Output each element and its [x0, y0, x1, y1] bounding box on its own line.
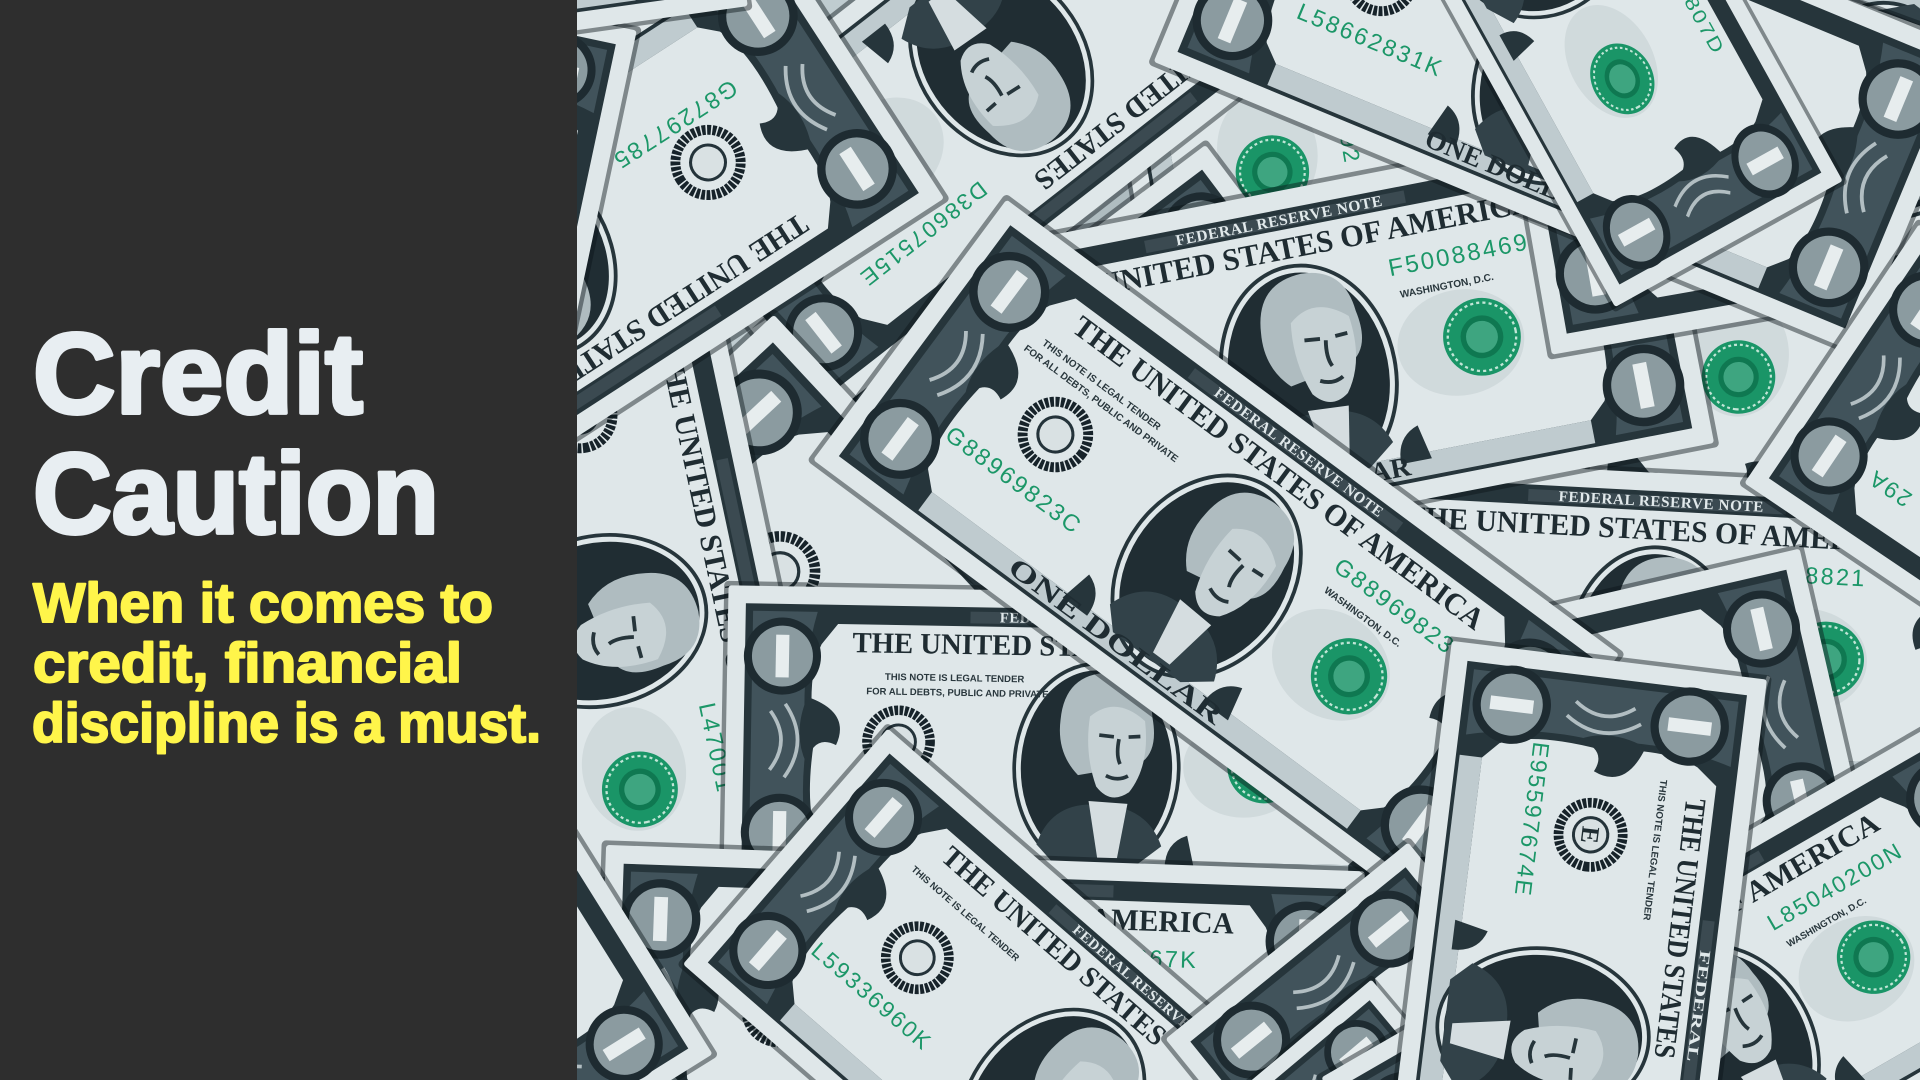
- bill: medallion fragment right: [1495, 0, 1920, 237]
- bill: main note G88969823C: G88969823: [1329, 554, 1460, 660]
- bill: the united states centre left: FOR ALL DEBTS, PUBLIC AND PRIVATE: [866, 686, 1049, 700]
- bill: L58662831K: ONE DOLLAR: [1421, 123, 1602, 221]
- bill: L59336960K bottom left: FEDERAL RESERVE NOTE: [1069, 922, 1229, 1065]
- bill: united states of america mid right: FEDERAL RESERVE NOTE: [1558, 488, 1764, 516]
- bill: F50088469: [1048, 163, 1719, 506]
- bill: F50088469: WASHINGTON, D.C.: [1399, 272, 1495, 301]
- background: pile of dollar bills photograph: [577, 0, 1920, 1080]
- bill: ornament fragment right: [1548, 544, 1855, 830]
- bill: F50088469: THE UNITED STATES OF AMERICA: [1025, 183, 1536, 316]
- bill: L59336960K bottom left: THIS NOTE IS LEGAL TENDER: [909, 864, 1021, 964]
- bill: strip at top left: [577, 0, 752, 34]
- bill: main note G88969823C: FEDERAL RESERVE NOTE: [1211, 384, 1386, 521]
- title: Credit Caution: [33, 311, 439, 558]
- bill: united states of america mid right: [1414, 465, 1920, 772]
- bill: far top right: [1444, 0, 1920, 351]
- bill: America 5867K bottom centre: [590, 840, 1370, 1080]
- bill: E95597674E bottom centre right: [1356, 636, 1772, 1080]
- bill: 3124807D: [1440, 0, 1847, 312]
- bill: main note G88969823C: WASHINGTON, D.C.: [1322, 585, 1403, 650]
- bill: L85040200N bottom right: [1315, 704, 1920, 1080]
- bill: main note G88969823C: [807, 193, 1625, 921]
- panel: dark left sidebar: [0, 0, 577, 1080]
- subtitle: financial discipline message: [32, 571, 541, 754]
- bill: E95597674E bottom centre right: FEDERAL: [1683, 949, 1713, 1063]
- subtitle: financial discipline message: credit, financial: [33, 631, 462, 694]
- subtitle: financial discipline message: discipline is a must.: [32, 691, 541, 754]
- bill: E95597674E bottom centre right: E95597674E: [1510, 741, 1554, 899]
- bill: dark right edge: 29A: [1863, 465, 1916, 513]
- bill: F50088469: ONE DOLLAR: [1224, 451, 1414, 517]
- bill: united states of america mid right: THE UNITED STATES OF AMERICA: [1405, 500, 1907, 560]
- bill: dark band bottom left: [602, 876, 605, 881]
- bill: dark ornament fragment top centre: [1088, 140, 1250, 228]
- bill: F50088469: F50088469: [1386, 228, 1532, 282]
- bill: far top right: F59149938: [1842, 3, 1917, 138]
- bill: green seal behind top centre: [1128, 101, 1405, 202]
- bill: dark right edge: [1740, 220, 1920, 607]
- bill: G87297785 top left: [577, 0, 949, 442]
- bill: America 5867K bottom centre: AMERICA: [1089, 902, 1235, 941]
- bill: F50088469: FEDERAL RESERVE NOTE: [1174, 193, 1384, 250]
- bill: dark fragment bottom left: [577, 829, 717, 1080]
- bill: green seal behind top centre: 81392: [1327, 88, 1366, 166]
- bill: E95597674E bottom centre right: THIS NOTE IS LEGAL TENDER: [1640, 779, 1669, 921]
- bill: the united states centre left: THIS NOTE IS LEGAL TENDER: [885, 672, 1024, 685]
- bill: upside down portrait with serial D38607515E: [744, 0, 1244, 402]
- bill: G87297785 top left: THE UNITED STATES OF AMERICA: [375, 207, 814, 508]
- bill: main note G88969823C: G88969823C: [940, 422, 1087, 540]
- bill: vertical left L47001: L47001: [694, 700, 738, 796]
- bill: one dollar edge far right: ONE DOLLAR: [1791, 711, 1866, 891]
- bill: ornament fragment bottom centre: [1161, 838, 1426, 1080]
- bill: the united states centre left: THE UNITED STATES OF AMERICA: [852, 627, 1338, 668]
- bill: L59336960K bottom left: L59336960K: [806, 937, 938, 1056]
- bill: sliver at far left: [577, 24, 642, 332]
- bill: L58662831K: [1148, 0, 1920, 358]
- bill: green seal behind right cluster: [1585, 320, 1837, 478]
- bill: ornament fragment under top left: [852, 184, 1134, 402]
- bill: L58662831K: L58662831K: [1293, 0, 1448, 82]
- title: Credit Caution: Credit: [33, 311, 363, 438]
- subtitle: financial discipline message: When it comes to: [33, 571, 493, 634]
- bill: vertical left L47001: THE UNITED STATES OF AMERICA: [653, 343, 790, 840]
- bill: L59336960K bottom left: THE UNITED STATES: [935, 840, 1172, 1053]
- bill: behind top right: [1491, 0, 1920, 360]
- bill: upside down portrait with serial D38607515E: D38607515E: [854, 176, 992, 292]
- bill: K82 under main note: K82: [657, 538, 713, 596]
- bill: main note G88969823C: FOR ALL DEBTS, PUBLIC AND PRIVATE: [1021, 343, 1180, 465]
- bill: L85040200N bottom right: STATES OF AMERICA: [1596, 807, 1885, 993]
- bill: vertical left L47001: [577, 338, 783, 876]
- bill: the united states centre left: FEDERAL RESERVE NOTE: [1000, 610, 1199, 630]
- bill: L85040200N bottom right: WASHINGTON, D.C.: [1785, 896, 1869, 950]
- bill: main note G88969823C: THE UNITED STATES OF AMERICA: [1066, 309, 1491, 637]
- bill: E95597674E bottom centre right: E: [1575, 825, 1605, 845]
- bill: America 5867K bottom centre: 5867K: [1118, 944, 1199, 973]
- bill: one dollar edge far right: [1690, 453, 1920, 1080]
- bill: small fragment bottom centre: [1246, 976, 1406, 1080]
- bill: main note G88969823C: ONE DOLLAR: [1003, 552, 1230, 731]
- bill: G87297785 top left: G87297785: [608, 75, 742, 175]
- title: Credit Caution: Caution: [33, 431, 439, 558]
- bill: main note G88969823C: THIS NOTE IS LEGAL TENDER: [1040, 338, 1162, 433]
- bill: the united states centre left: [720, 580, 1370, 878]
- bill: L85040200N bottom right: L85040200N: [1762, 837, 1907, 936]
- bill: L59336960K bottom left: [678, 724, 1210, 1080]
- bill: united states of america mid right: 8821: [1805, 562, 1867, 591]
